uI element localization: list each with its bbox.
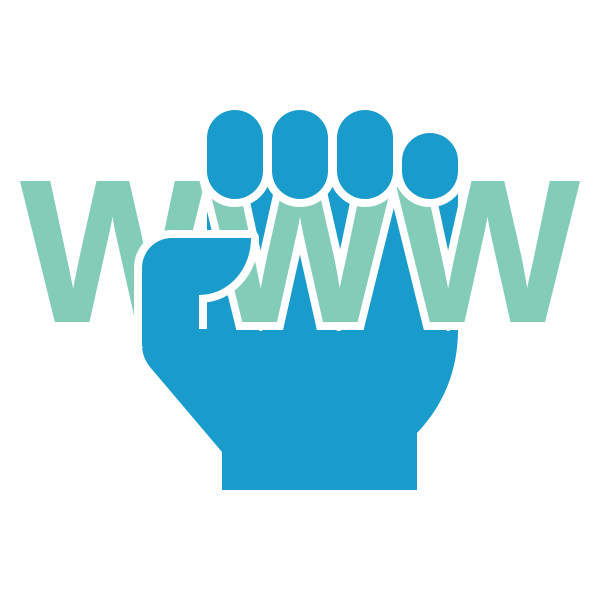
- wordmark: WWW: [20, 181, 580, 331]
- letter W 3: [394, 181, 580, 331]
- finger 1: [207, 110, 263, 199]
- letter W 2: W: [208, 138, 392, 364]
- letter W 1: [20, 181, 202, 322]
- letter W 1: W: [21, 138, 204, 364]
- letter W 3: W: [396, 138, 579, 364]
- icon: fist gripping WWW: [20, 110, 580, 490]
- hand: palm and wrist: [142, 165, 458, 490]
- letter W 2: [200, 181, 394, 331]
- hand: thumb: [142, 238, 251, 352]
- letter W 3: W: [396, 138, 579, 364]
- finger 4: [402, 133, 458, 199]
- finger 2: [272, 110, 328, 199]
- finger 3: [337, 110, 393, 199]
- letter W 1: W: [21, 138, 204, 364]
- hand: fingers: [207, 110, 458, 199]
- letter W 2: W: [208, 138, 392, 364]
